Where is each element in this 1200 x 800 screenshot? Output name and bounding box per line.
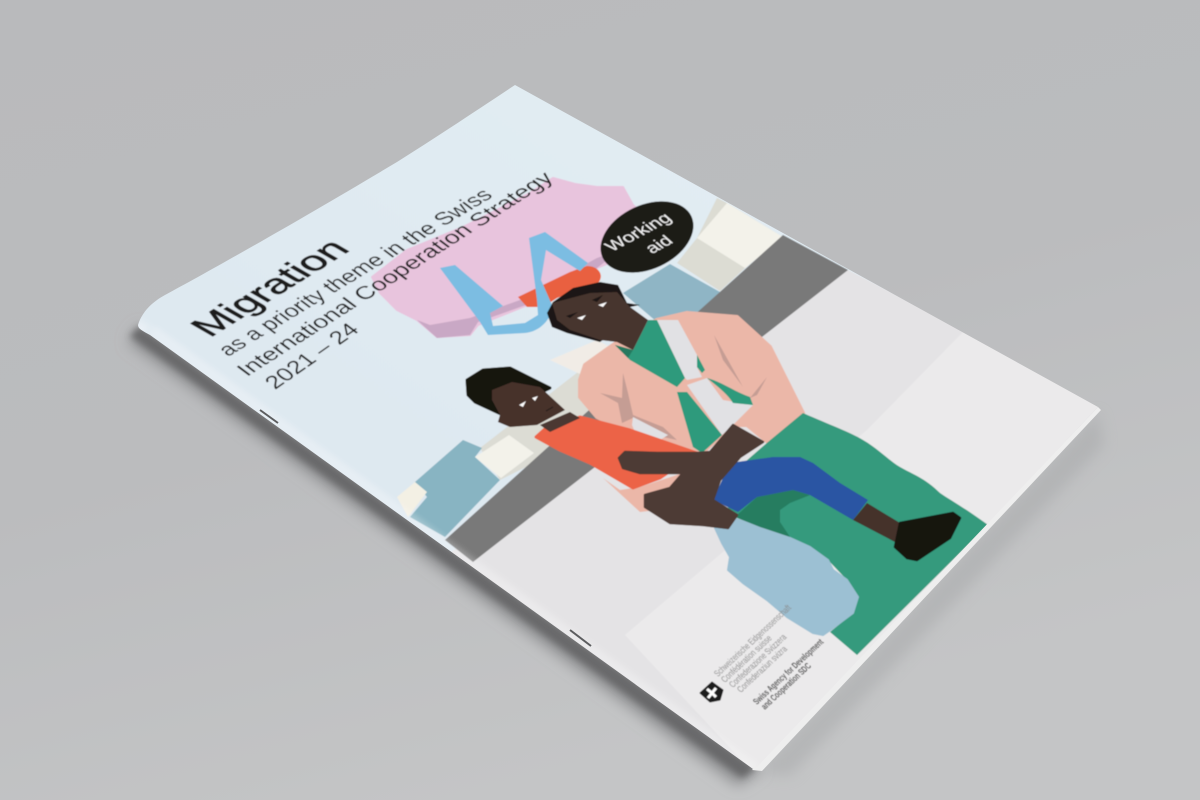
blue cloud: [715, 518, 858, 635]
green dress: [715, 413, 988, 655]
arms and hand: [619, 425, 763, 528]
child's trousers: [713, 457, 868, 520]
child's shirt: [536, 417, 697, 488]
child's lower leg: [853, 503, 900, 542]
heading: Migration: Migration: [180, 233, 358, 342]
publisher logo text: [712, 603, 826, 711]
child's head: [467, 368, 580, 432]
scarf: [615, 320, 753, 453]
pink under arm: [603, 473, 683, 512]
red hat: [518, 266, 601, 307]
publisher logo text: Confederaziun svizra: [735, 644, 790, 694]
shirt gap patch: [632, 417, 668, 440]
publisher logo text: and Cooperation SDC: [759, 661, 813, 711]
subtitle line 1: as a priority theme in the Swiss: [212, 184, 498, 360]
title: [180, 167, 558, 393]
brochure page stack edge: [752, 407, 1101, 771]
fold highlight: [138, 324, 145, 331]
brochure cover: [138, 85, 1098, 769]
lower ground area: [453, 270, 962, 750]
working aid badge: [600, 200, 694, 274]
cover sky: [138, 85, 886, 552]
mother torso: [580, 313, 803, 453]
subtitle line 2: International Cooperation Strategy: [231, 167, 558, 380]
background skyline blocks: [397, 198, 783, 537]
grey road band: [445, 235, 848, 562]
spine shading: [155, 336, 477, 562]
child's knee dark green: [735, 490, 810, 537]
staples: [260, 410, 591, 646]
torso folds: [600, 335, 767, 440]
brochure shadow: [128, 326, 1104, 786]
mother neck and head: [547, 282, 648, 350]
working aid badge: Working: [601, 210, 676, 255]
subtitle line 3: 2021 – 24: [259, 319, 364, 393]
bag straps: [440, 232, 588, 335]
publisher logo text: Schweizerische Eidgenossenschaft: [712, 603, 793, 678]
child's shoe: [895, 513, 960, 560]
publisher logo text: Swiss Agency for Development: [751, 637, 826, 706]
publisher logo text: Confederazione Svizzera: [727, 632, 789, 689]
lower ground lighter block: [625, 330, 1110, 780]
swiss shield icon: [700, 682, 723, 702]
publisher logo text: Confédération suisse: [719, 634, 774, 684]
working aid badge: aid: [641, 232, 677, 257]
pink bag: [372, 178, 655, 338]
